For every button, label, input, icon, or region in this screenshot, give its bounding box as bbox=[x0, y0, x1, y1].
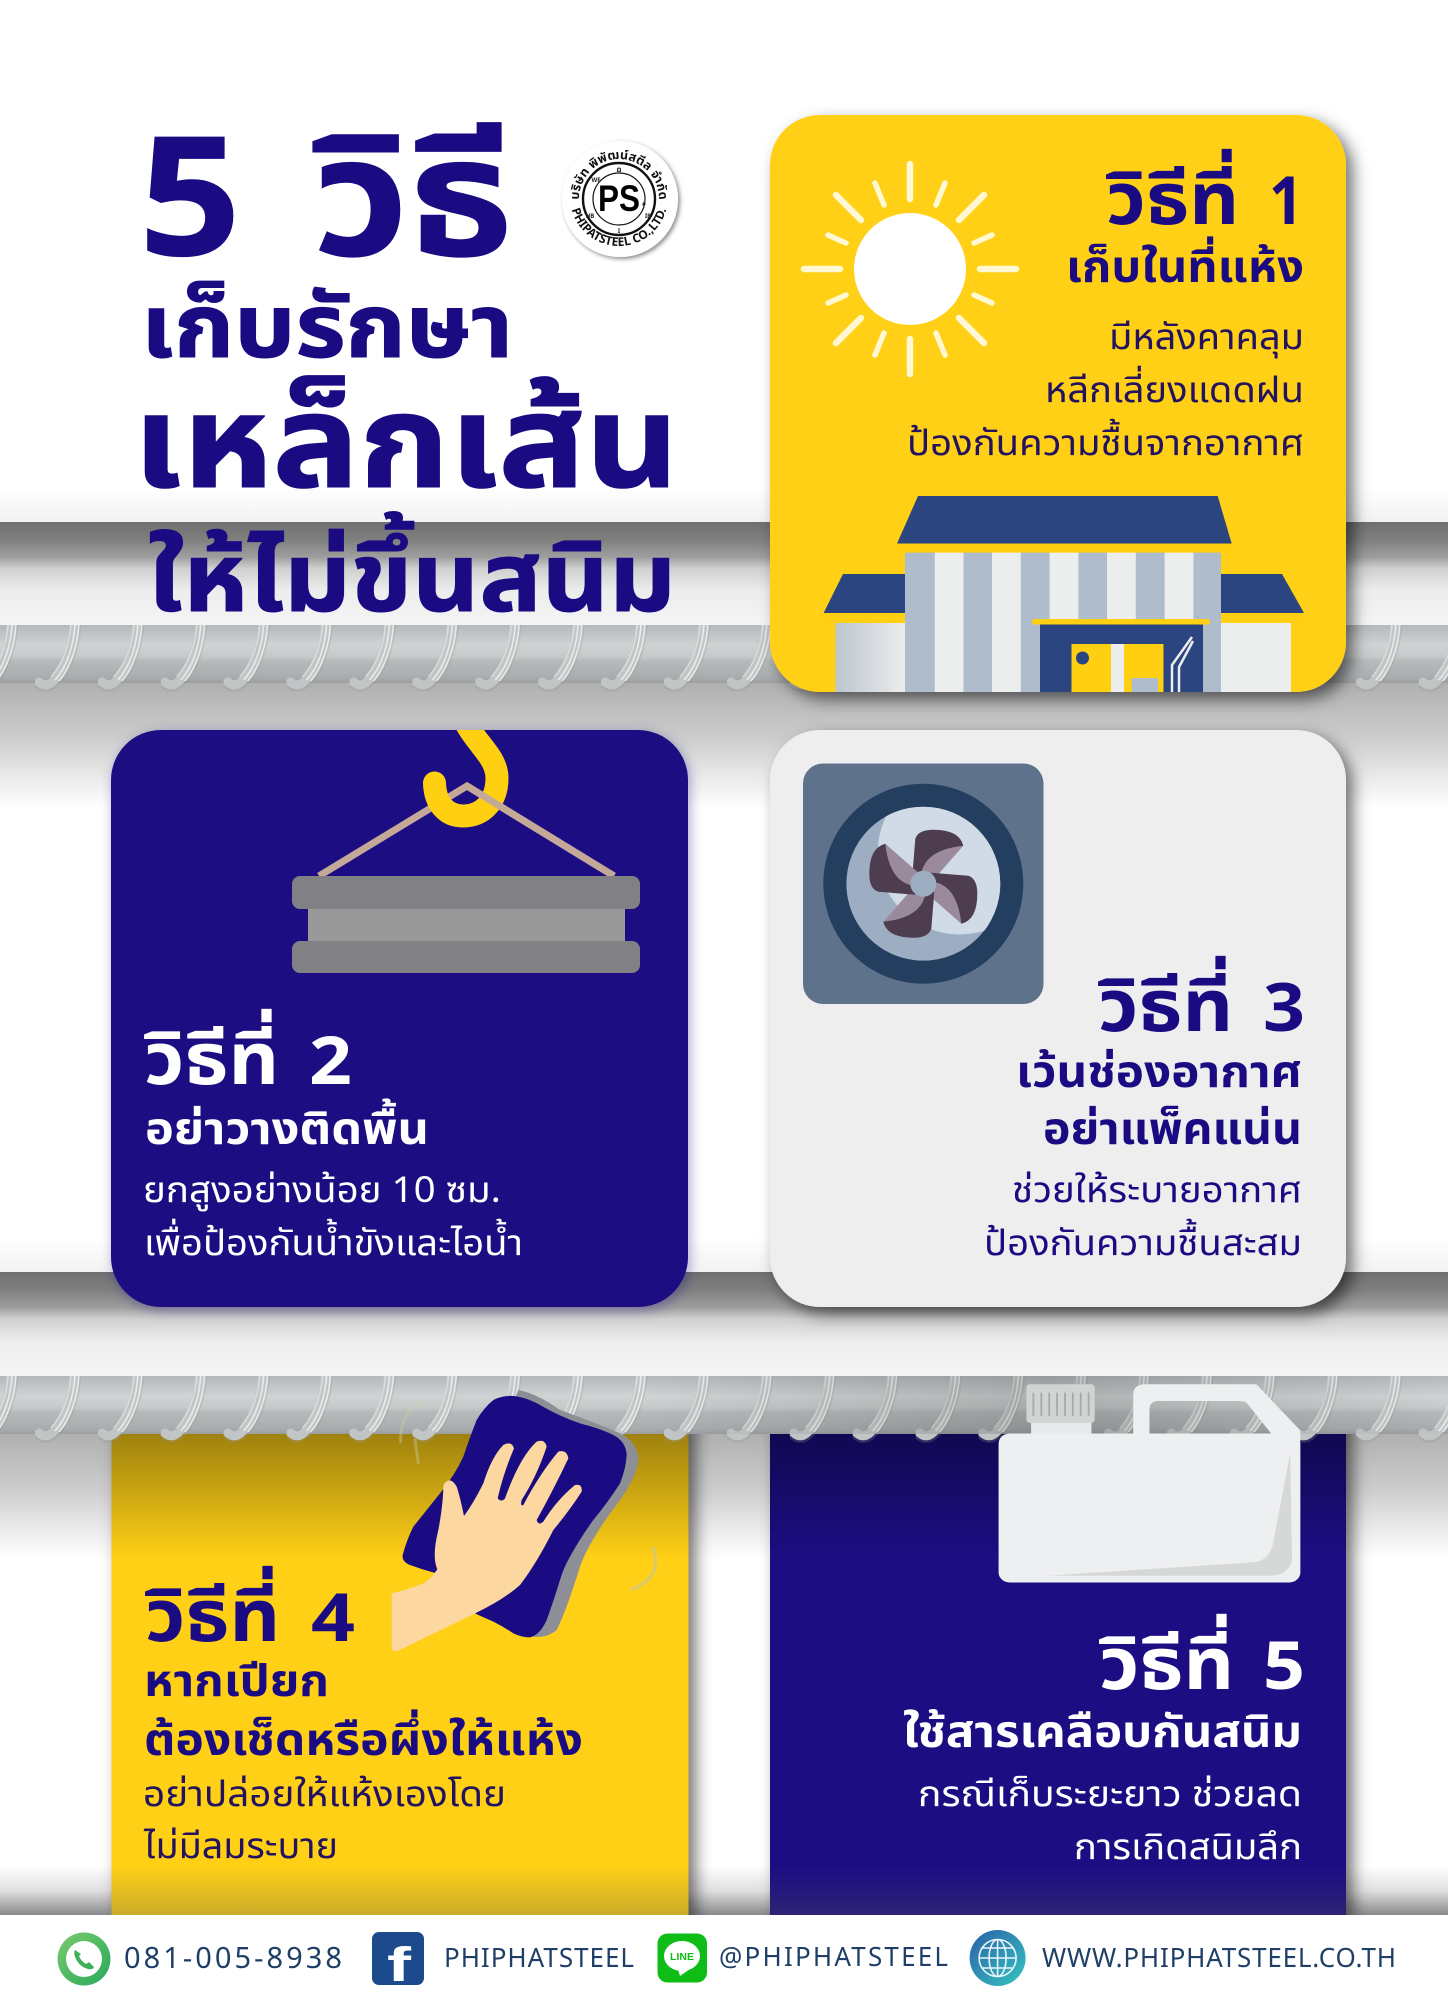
company logo: IB bbox=[645, 212, 651, 221]
heading: method 5: วิธีที่ bbox=[1099, 1614, 1234, 1722]
heading: method 2 bbox=[144, 1009, 352, 1117]
title: เก็บรักษา bbox=[141, 264, 513, 397]
heading: method 5 bbox=[1099, 1614, 1305, 1722]
heading: method 3: 3 bbox=[1263, 961, 1305, 1061]
body text: method 1: หลีกเลี่ยงแดดฝน bbox=[1045, 365, 1304, 419]
icon: phone bbox=[58, 1932, 110, 1986]
icon: sun bbox=[804, 164, 1016, 374]
title: 5 bbox=[139, 81, 241, 330]
title: วิธี bbox=[313, 81, 513, 330]
subheading: method 4: ต้องเช็ดหรือผึ่งให้แห้ง bbox=[144, 1708, 583, 1775]
icon: facebook bbox=[372, 1932, 424, 1992]
subheading: method 3: เว้นช่องอากาศ bbox=[1016, 1040, 1302, 1107]
subheading: method 1: เก็บในที่แห้ง bbox=[1066, 235, 1304, 302]
subheading: method 5: ใช้สารเคลือบกันสนิม bbox=[903, 1700, 1302, 1767]
body text: method 4: อย่าปล่อยให้แห้งเองโดย bbox=[143, 1769, 506, 1823]
title: ให้ไม่ขึ้นสนิม bbox=[148, 510, 676, 655]
heading: method 4: วิธีที่ bbox=[145, 1566, 280, 1674]
body text: method 4: ไม่มีลมระบาย bbox=[143, 1821, 338, 1875]
body text: method 4 bbox=[143, 1769, 506, 1875]
company logo: WF bbox=[591, 176, 601, 185]
heading: method 2: 2 bbox=[309, 1014, 352, 1114]
body text: method 2: เพื่อป้องกันน้ำขังและไอน้ำ bbox=[144, 1218, 523, 1272]
lower steel pipe background bbox=[0, 1237, 1448, 1915]
body text: method 3: ป้องกันความชื้นสะสม bbox=[984, 1218, 1302, 1272]
text: method 4 bbox=[143, 1566, 583, 1875]
company logo: PHIPATSTEEL CO.,LTD. bbox=[572, 208, 666, 246]
icon: line: LINE bbox=[670, 1951, 694, 1963]
heading: method 4: 4 bbox=[311, 1571, 355, 1671]
company logo bbox=[561, 140, 683, 262]
icon: line bbox=[658, 1934, 707, 1982]
icon: coating jug bbox=[999, 1384, 1300, 1582]
line id: @PHIPHATSTEEL bbox=[719, 1938, 948, 1974]
subheading: method 3 bbox=[1016, 1040, 1302, 1164]
phone number: 081-005-8938 bbox=[124, 1938, 342, 1977]
company logo: Ω bbox=[617, 166, 622, 175]
lower rebar bbox=[0, 1376, 1448, 1448]
heading: method 2: วิธีที่ bbox=[144, 1009, 279, 1117]
body text: method 3 bbox=[984, 1165, 1302, 1272]
website: WWW.PHIPHATSTEEL.CO.TH bbox=[1042, 1939, 1396, 1975]
footer contact bar bbox=[0, 1915, 1448, 2000]
subheading: method 4 bbox=[144, 1649, 583, 1775]
text: method 5 bbox=[903, 1614, 1305, 1876]
subheading: method 3: อย่าแพ็คแน่น bbox=[1043, 1097, 1302, 1164]
panel: method 2 do not place on the floor bbox=[111, 725, 688, 1307]
icon: warehouse bbox=[818, 496, 1308, 692]
panel: method 5 background card bbox=[770, 1400, 1346, 1915]
icon: hand wiping with cloth bbox=[392, 1390, 656, 1651]
body text: method 5 bbox=[918, 1769, 1302, 1876]
subheading: method 4: หากเปียก bbox=[144, 1649, 329, 1716]
heading: method 4 bbox=[145, 1566, 355, 1674]
company logo: I bbox=[618, 227, 621, 236]
subheading: method 2: อย่าวางติดพื้น bbox=[145, 1097, 429, 1164]
icon: ventilation fan bbox=[803, 764, 1044, 1004]
panel: method 3 leave air gaps bbox=[770, 730, 1346, 1307]
title: เหล็กเส้น bbox=[133, 350, 679, 546]
heading: method 3 bbox=[1098, 956, 1305, 1064]
panel: method 4 background card bbox=[112, 1400, 688, 1915]
upper steel pipe and rebar bbox=[0, 487, 1448, 808]
heading: method 5: 5 bbox=[1263, 1619, 1305, 1719]
body text: method 5: กรณีเก็บระยะยาว ช่วยลด bbox=[918, 1769, 1302, 1823]
panel: method 1 keep in a dry place bbox=[770, 115, 1346, 692]
body text: method 3: ช่วยให้ระบายอากาศ bbox=[1012, 1165, 1302, 1219]
body text: method 1: มีหลังคาคลุม bbox=[1109, 312, 1304, 366]
icon: crane hook lifting steel beam bbox=[292, 725, 640, 973]
heading: method 1: วิธีที่ bbox=[1106, 149, 1239, 257]
body text: method 5: การเกิดสนิมลึก bbox=[1074, 1822, 1302, 1876]
company logo: บริษัท พิพัฒน์สตีล จำกัด bbox=[571, 150, 668, 199]
heading: method 3: วิธีที่ bbox=[1098, 956, 1233, 1064]
title bbox=[133, 81, 679, 655]
heading: method 1: 1 bbox=[1269, 154, 1303, 254]
body text: method 2: ยกสูงอย่างน้อย 10 ซม. bbox=[143, 1165, 501, 1219]
body text: method 1: ป้องกันความชื้นจากอากาศ bbox=[907, 418, 1304, 472]
facebook name: PHIPHATSTEEL bbox=[444, 1939, 634, 1975]
icon: globe bbox=[970, 1930, 1026, 1986]
shadow overlays on lower cards bbox=[112, 1434, 1346, 1915]
company logo: # bbox=[642, 200, 646, 209]
company logo: PS bbox=[598, 178, 640, 219]
body text: method 2 bbox=[143, 1165, 523, 1272]
body text: method 1 bbox=[907, 312, 1304, 472]
heading: method 1 bbox=[1106, 149, 1303, 257]
company logo: HB bbox=[586, 212, 594, 221]
icon: facebook: f bbox=[387, 1939, 413, 1992]
